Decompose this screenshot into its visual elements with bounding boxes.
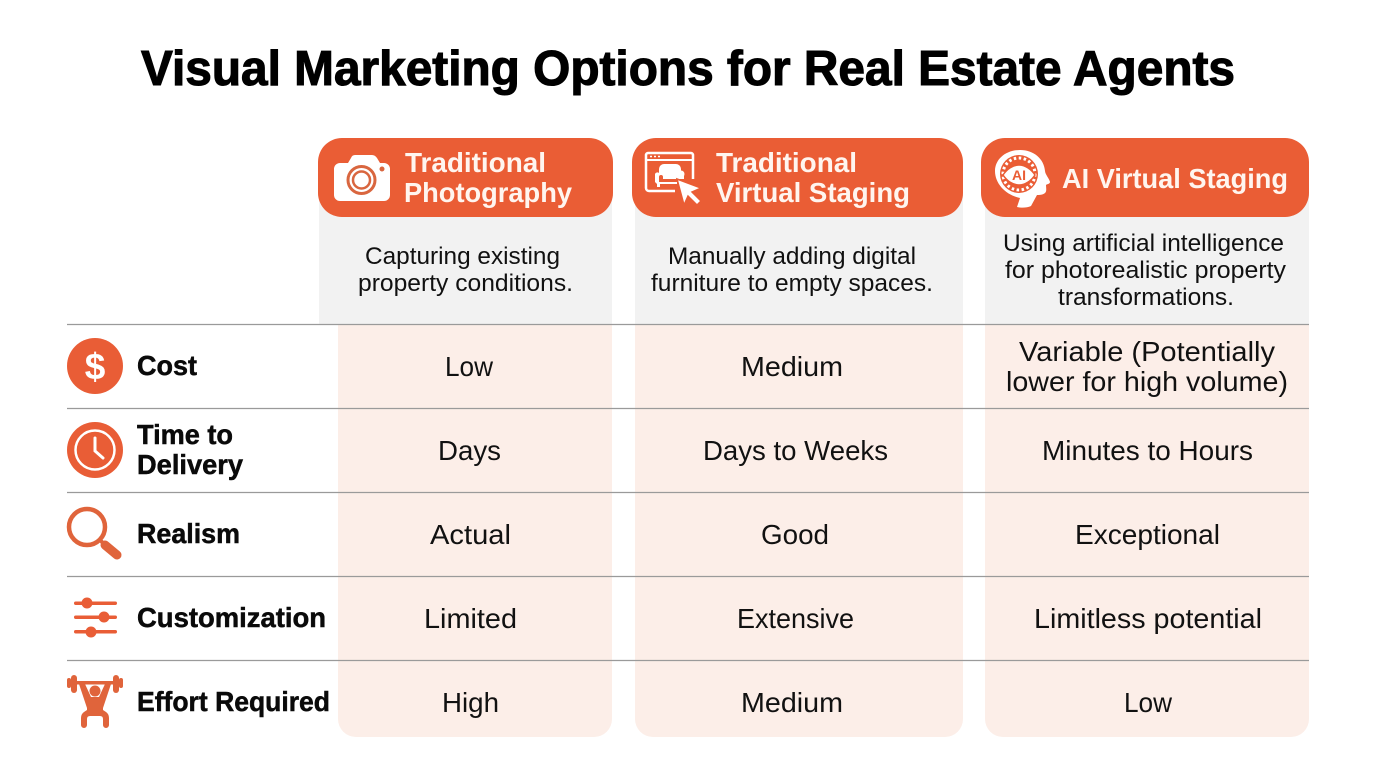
description: AI virtual staging: for photorealistic property	[1005, 257, 1287, 284]
row: effort required: High	[442, 687, 499, 718]
column header: AI virtual staging	[981, 138, 1309, 217]
row: realism: Exceptional	[1075, 519, 1220, 550]
description: traditional virtual staging: Manually adding digital	[668, 243, 916, 270]
row: cost: Medium	[741, 351, 843, 382]
column header: traditional virtual staging: Virtual Staging	[716, 177, 910, 208]
row: time to delivery: Minutes to Hours	[1042, 435, 1253, 466]
icon: dollar coin: $	[85, 346, 106, 387]
description: AI virtual staging	[1003, 230, 1287, 311]
description: traditional photography: property conditions.	[358, 270, 573, 297]
row: customization: Extensive	[737, 603, 854, 634]
row: effort required: Low	[1124, 687, 1172, 718]
row: time to delivery: Days to Weeks	[703, 435, 888, 466]
column header: traditional photography: Traditional	[405, 147, 546, 178]
row: realism: Good	[761, 519, 829, 550]
icon: clock	[67, 422, 123, 478]
panel: traditional photography column	[318, 138, 613, 737]
row: realism: Actual	[430, 519, 511, 550]
row: time to delivery: Time to	[137, 419, 233, 450]
row: effort required	[67, 675, 1172, 728]
row: realism: Realism	[137, 518, 240, 549]
row: cost	[67, 336, 1288, 397]
icon: sliders	[74, 598, 117, 638]
row: customization: Customization	[137, 602, 326, 633]
column header: traditional virtual staging: Traditional	[716, 147, 857, 178]
row: realism	[69, 509, 1220, 555]
icon: dollar coin	[67, 338, 123, 394]
description: AI virtual staging: transformations.	[1058, 284, 1234, 311]
title: Visual Marketing Options for Real Estate Agents	[141, 42, 1235, 96]
row: time to delivery: Delivery	[137, 449, 244, 480]
row: customization: Limitless potential	[1034, 603, 1262, 634]
column header: traditional virtual staging	[632, 138, 963, 217]
column header: traditional photography	[318, 138, 613, 217]
column header: AI virtual staging: AI Virtual Staging	[1062, 163, 1288, 194]
row: effort required: Effort Required	[137, 686, 330, 717]
icon: virtual staging window with cursor	[646, 153, 701, 205]
description: AI virtual staging: Using artificial intelligence	[1003, 230, 1284, 257]
icon: AI head: AI	[1012, 167, 1026, 183]
row: cost: Cost	[137, 350, 197, 381]
row: cost: Variable (Potentially	[1019, 336, 1275, 367]
description: traditional photography	[358, 243, 573, 297]
row: customization: Limited	[424, 603, 517, 634]
row: effort required: Medium	[741, 687, 843, 718]
column header: traditional photography: Photography	[404, 177, 572, 208]
description: traditional virtual staging: furniture to empty spaces.	[651, 270, 933, 297]
description: traditional photography: Capturing existing	[365, 243, 560, 270]
panel: AI virtual staging column	[981, 138, 1309, 737]
row: cost: Low	[445, 351, 493, 382]
row: customization	[74, 598, 1262, 638]
row: time to delivery	[67, 419, 1253, 480]
row: cost: lower for high volume)	[1006, 366, 1288, 397]
icon: magnifying glass	[69, 509, 117, 555]
icon: AI head	[995, 150, 1050, 208]
row: time to delivery: Days	[438, 435, 501, 466]
panel: traditional virtual staging column	[632, 138, 963, 737]
description: traditional virtual staging	[651, 243, 933, 297]
icon: camera	[334, 155, 390, 201]
icon: weightlifter	[67, 675, 123, 728]
